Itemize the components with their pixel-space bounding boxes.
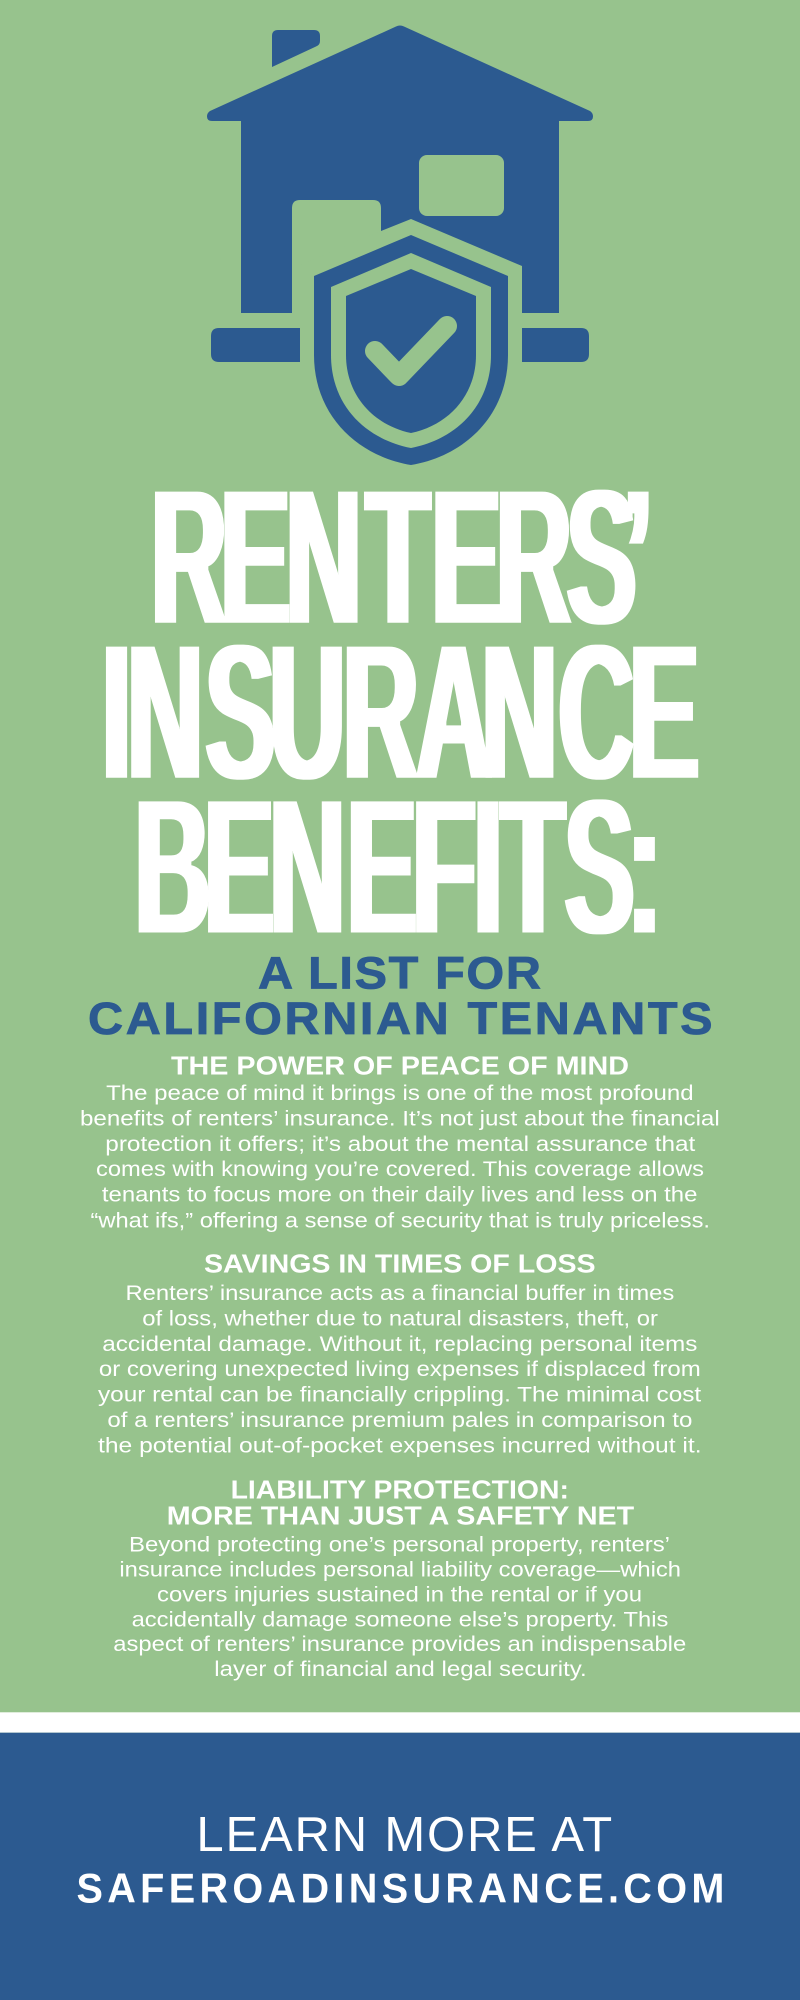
footer call to action: LEARN MORE AT xyxy=(196,1808,612,1862)
paragraph: benefits of renters’ insurance. It’s not just about the financial xyxy=(80,1107,720,1130)
footer background xyxy=(0,1733,800,2000)
paragraph: your rental can be financially crippling. The minimal cost xyxy=(98,1383,701,1406)
check mark xyxy=(375,326,447,376)
subtitle: CALIFORNIAN TENANTS xyxy=(88,994,713,1044)
paragraph: The peace of mind it brings is one of the most profound xyxy=(106,1082,694,1105)
paragraph: accidentally damage someone else’s property. This xyxy=(132,1609,668,1632)
paragraph: of loss, whether due to natural disasters, theft, or xyxy=(142,1307,658,1330)
left base xyxy=(211,328,300,362)
chimney xyxy=(272,30,320,67)
paragraph: the potential out-of-pocket expenses incurred without it. xyxy=(98,1434,702,1457)
paragraph xyxy=(80,1082,720,1232)
right base xyxy=(522,328,589,362)
shield middle band xyxy=(331,253,491,448)
title: RENTERS’ xyxy=(151,449,653,667)
paragraph: protection it offers; it’s about the mental assurance that xyxy=(105,1133,695,1156)
paragraph: accidental damage. Without it, replacing personal items xyxy=(102,1333,697,1356)
heading: LIABILITY PROTECTION: xyxy=(231,1476,569,1504)
shield inner xyxy=(346,269,476,433)
section: the power of peace of mind xyxy=(80,1052,720,1232)
subtitle xyxy=(88,948,713,1044)
shield outer xyxy=(314,235,508,465)
paragraph: covers injuries sustained in the rental or if you xyxy=(157,1584,642,1607)
shield halo xyxy=(300,219,522,320)
heading: MORE THAN JUST A SAFETY NET xyxy=(167,1503,635,1531)
window xyxy=(419,155,504,216)
paragraph: layer of financial and legal security. xyxy=(214,1658,587,1681)
paragraph: “what ifs,” offering a sense of security that is truly priceless. xyxy=(90,1209,710,1232)
title xyxy=(102,449,699,976)
paragraph: Beyond protecting one’s personal property, renters’ xyxy=(129,1534,670,1557)
title: INSURANCE xyxy=(102,604,699,822)
paragraph xyxy=(113,1534,686,1681)
white divider band xyxy=(0,1712,800,1733)
icon: house with shield and check mark xyxy=(207,26,593,465)
heading xyxy=(167,1476,635,1531)
section: liability protection xyxy=(113,1476,686,1681)
subtitle: A LIST FOR xyxy=(258,948,541,998)
paragraph: tenants to focus more on their daily lives and less on the xyxy=(102,1183,697,1206)
door xyxy=(292,200,381,320)
paragraph: Renters’ insurance acts as a financial buffer in times xyxy=(126,1282,674,1305)
paragraph: of a renters’ insurance premium pales in comparison to xyxy=(107,1409,692,1432)
section: savings in times of loss xyxy=(98,1250,702,1457)
footer website: SAFEROADINSURANCE.COM xyxy=(76,1865,724,1912)
footer panel xyxy=(0,1733,800,2000)
house silhouette xyxy=(207,26,593,313)
paragraph xyxy=(98,1282,702,1457)
paragraph: insurance includes personal liability coverage—which xyxy=(119,1559,681,1582)
paragraph: comes with knowing you’re covered. This coverage allows xyxy=(96,1158,704,1181)
paragraph: or covering unexpected living expenses if displaced from xyxy=(99,1358,701,1381)
heading: SAVINGS IN TIMES OF LOSS xyxy=(204,1250,596,1278)
heading: THE POWER OF PEACE OF MIND xyxy=(171,1052,629,1080)
title: BENEFITS: xyxy=(135,759,662,976)
paragraph: aspect of renters’ insurance provides an indispensable xyxy=(113,1633,686,1656)
